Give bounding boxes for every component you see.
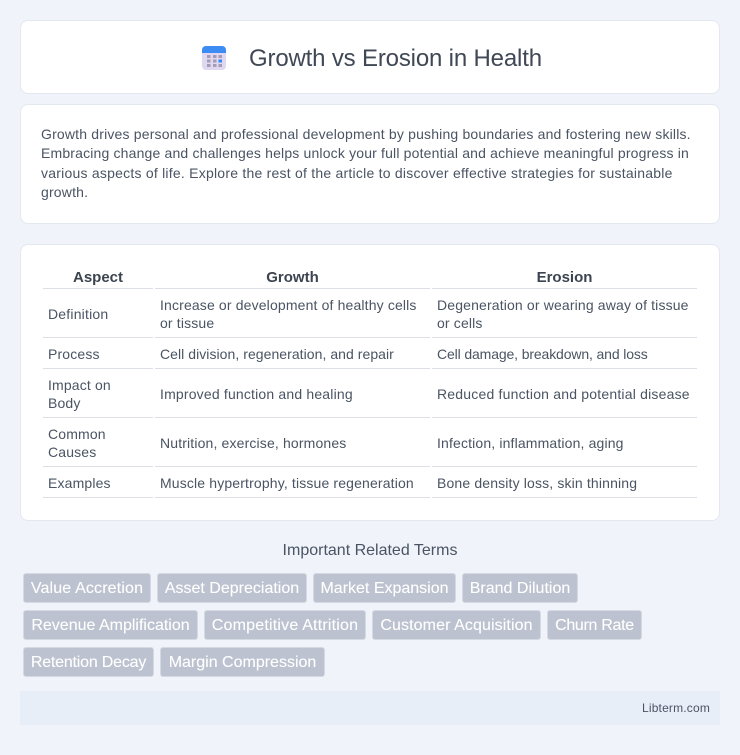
table rows: Improved function and healing	[160, 386, 353, 402]
table rows: Bone density loss, skin thinning	[437, 475, 637, 491]
table rows: Reduced function and potential disease	[437, 386, 690, 402]
table header: Erosion	[537, 269, 592, 286]
related terms tags: Margin Compression	[169, 654, 316, 671]
related terms tags	[23, 573, 642, 677]
header card	[20, 20, 720, 94]
related terms tags: Market Expansion	[320, 580, 449, 597]
table header: Growth	[266, 269, 319, 286]
table rows: or tissue	[160, 315, 214, 331]
table rows: Definition	[48, 306, 108, 322]
title: Growth vs Erosion in Health	[249, 45, 542, 72]
related terms tags: Customer Acquisition	[380, 617, 533, 634]
table rows: Causes	[48, 444, 96, 460]
intro paragraph: various aspects of life. Explore the rest of the article to discover effective strategies for sustainable	[41, 165, 673, 181]
table rows: Examples	[48, 475, 111, 491]
related terms tags: Value Accretion	[31, 580, 143, 597]
intro paragraph: Growth drives personal and professional development by pushing boundaries and fostering new skills.	[41, 126, 691, 142]
related terms tags: Brand Dilution	[470, 580, 570, 597]
table rows: Degeneration or wearing away of tissue	[437, 297, 689, 313]
intro paragraph: growth.	[41, 184, 88, 200]
table rows: Cell division, regeneration, and repair	[160, 346, 394, 362]
table rows: Cell damage, breakdown, and loss	[437, 346, 648, 362]
table rows: Muscle hypertrophy, tissue regeneration	[160, 475, 414, 491]
related terms heading: Important Related Terms	[283, 542, 457, 559]
intro paragraph: Embracing change and challenges helps unlock your full potential and achieve meaningful progress in	[41, 145, 689, 161]
intro text card	[20, 104, 720, 224]
comparison table card	[20, 244, 720, 521]
related terms tags: Retention Decay	[31, 654, 146, 671]
intro paragraph	[41, 126, 691, 200]
footer bar	[20, 691, 720, 725]
table header: Aspect	[73, 269, 123, 286]
table rows: Body	[48, 395, 81, 411]
related terms tags: Revenue Amplification	[31, 617, 190, 634]
table rows: Impact on	[48, 377, 111, 393]
table rows: Increase or development of healthy cells	[160, 297, 417, 313]
table rows: Process	[48, 346, 100, 362]
table header	[73, 269, 592, 286]
related terms tags: Competitive Attrition	[212, 617, 358, 634]
table rows: Nutrition, exercise, hormones	[160, 435, 346, 451]
table rows: Infection, inflammation, aging	[437, 435, 624, 451]
footer brand: Libterm.com	[642, 701, 710, 715]
table rows: Common	[48, 426, 106, 442]
table rows: or cells	[437, 315, 483, 331]
icon: calendar	[202, 46, 226, 70]
related terms tags: Churn Rate	[555, 617, 634, 634]
table rows	[43, 288, 697, 498]
related terms tags: Asset Depreciation	[165, 580, 299, 597]
